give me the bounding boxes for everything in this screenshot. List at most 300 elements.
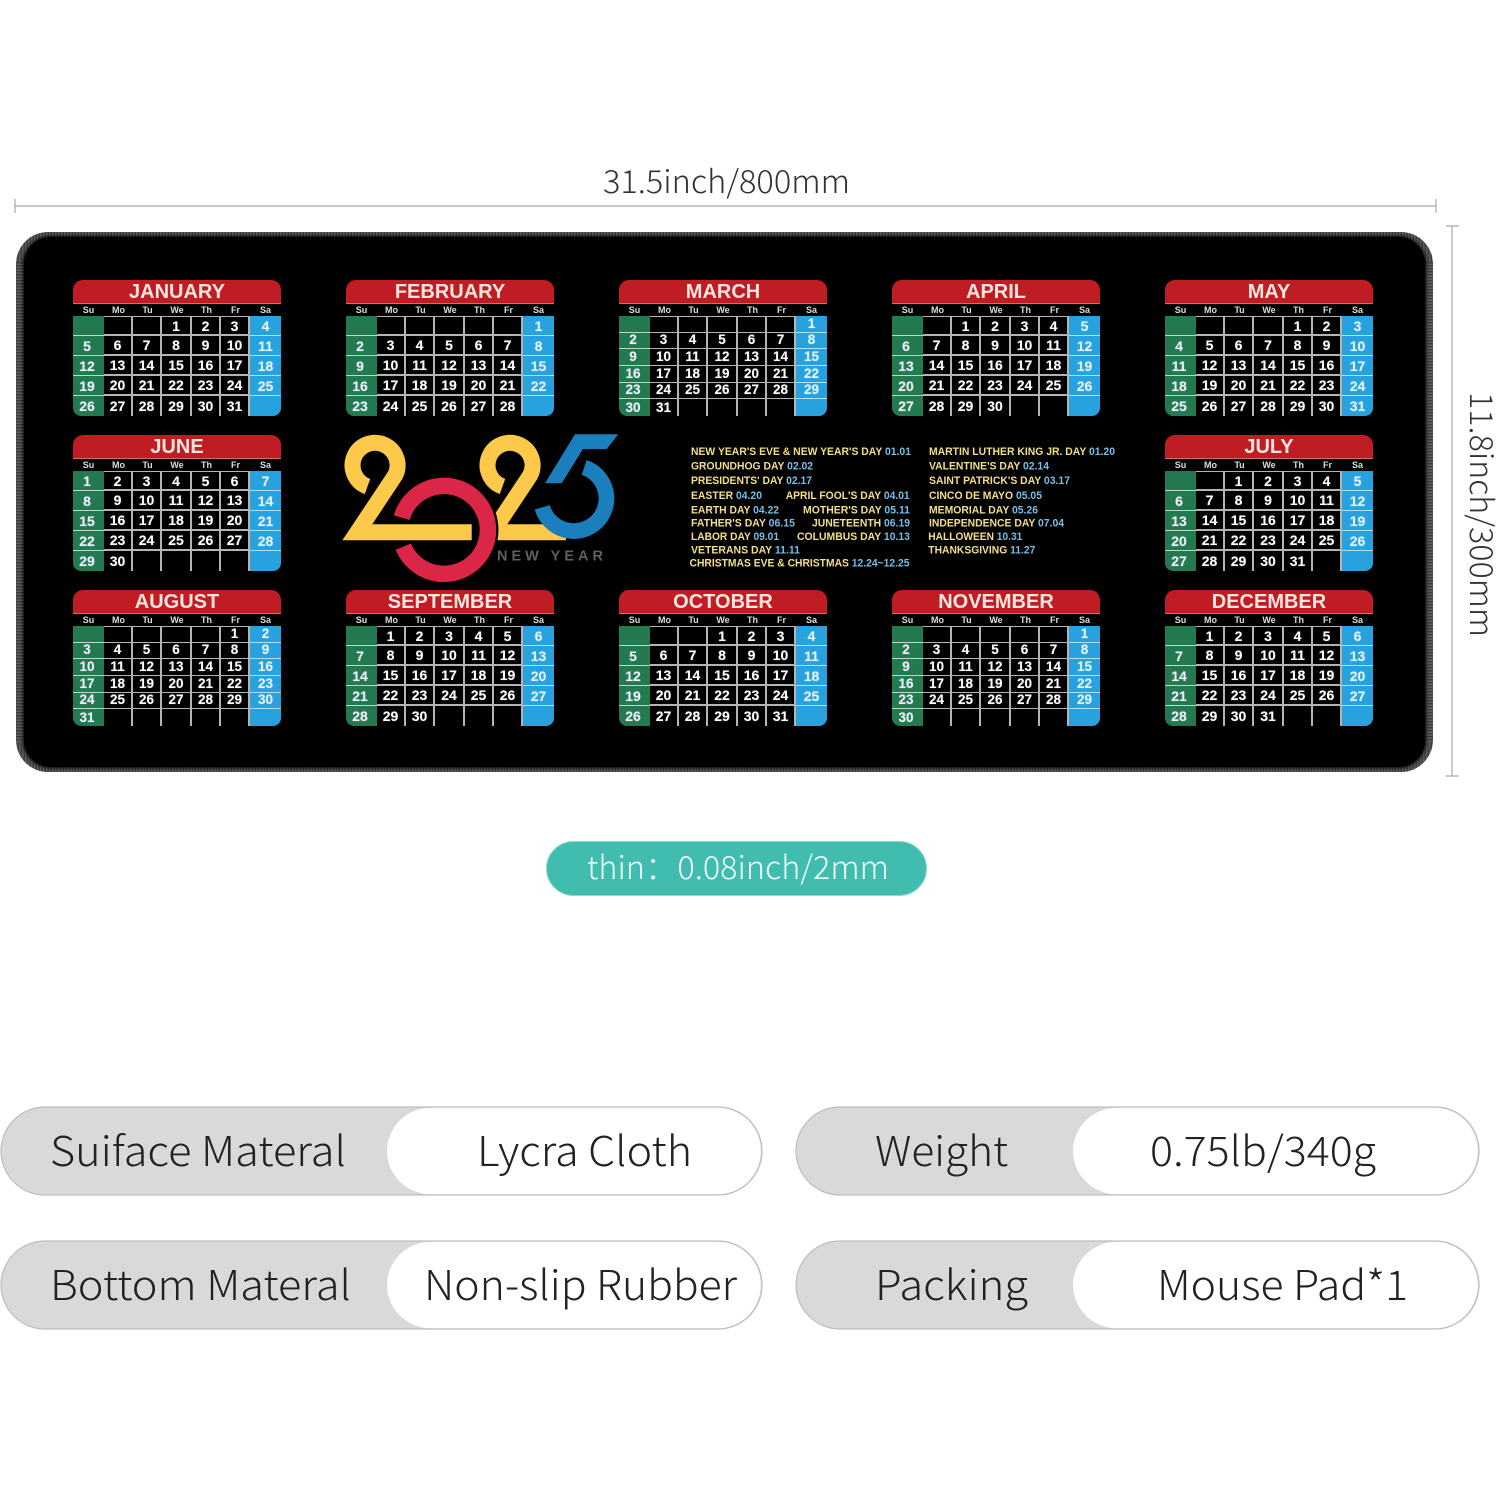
- November calendar: Mo: [931, 615, 944, 625]
- November calendar: 21: [1046, 676, 1061, 691]
- April calendar: 10: [1017, 337, 1032, 353]
- December calendar: 12: [1319, 647, 1334, 663]
- September calendar: 6: [535, 628, 542, 644]
- May calendar: Tu: [1234, 305, 1245, 315]
- March calendar: 5: [718, 332, 726, 347]
- February calendar: 9: [356, 358, 364, 374]
- January calendar: 2: [202, 318, 209, 334]
- March calendar: Th: [747, 305, 758, 315]
- September calendar: 18: [471, 667, 486, 683]
- August calendar: 17: [79, 676, 95, 691]
- July calendar: 17: [1290, 512, 1305, 528]
- April calendar: Th: [1020, 305, 1031, 315]
- left holiday column: FATHER'S DAY 06.15: [691, 518, 795, 530]
- December calendar: 6: [1354, 628, 1361, 644]
- August calendar: [73, 590, 281, 726]
- August calendar: 1: [231, 626, 238, 641]
- December calendar: 9: [1235, 647, 1242, 663]
- April calendar: 5: [1081, 318, 1088, 334]
- March calendar: 20: [744, 366, 759, 381]
- September calendar: 21: [352, 688, 368, 704]
- height dimension line: [1446, 226, 1459, 776]
- July calendar: JULY: [1244, 436, 1294, 458]
- November calendar: 28: [1046, 692, 1061, 707]
- March calendar: 23: [625, 382, 641, 397]
- January calendar: JANUARY: [129, 281, 225, 303]
- October calendar: 12: [625, 668, 641, 684]
- New Year caption: NEW YEAR: [497, 548, 604, 564]
- June calendar: 27: [227, 532, 242, 548]
- October calendar: Su: [629, 615, 640, 625]
- May calendar: 6: [1235, 337, 1242, 353]
- December calendar: 26: [1319, 687, 1334, 703]
- July calendar: 7: [1206, 492, 1213, 508]
- May calendar: 25: [1171, 398, 1187, 414]
- October calendar: 3: [777, 628, 784, 644]
- February calendar: 23: [352, 398, 368, 414]
- December calendar: [1165, 590, 1373, 726]
- April calendar: 19: [1077, 358, 1092, 374]
- March calendar: 11: [685, 349, 700, 364]
- May calendar: Su: [1175, 305, 1186, 315]
- January calendar: 31: [227, 398, 242, 414]
- February calendar: 14: [500, 357, 515, 373]
- May calendar: 3: [1354, 318, 1361, 334]
- March calendar: 6: [748, 332, 755, 347]
- March calendar: 24: [656, 382, 671, 397]
- March calendar: 3: [660, 332, 667, 347]
- November calendar: 29: [1077, 692, 1092, 707]
- October calendar: 20: [656, 687, 671, 703]
- May calendar: Sa: [1352, 305, 1363, 315]
- June calendar: 2: [114, 472, 121, 488]
- October calendar: 5: [629, 648, 637, 664]
- July calendar: 13: [1171, 512, 1187, 528]
- January calendar: 22: [168, 377, 184, 393]
- August calendar: Th: [201, 615, 212, 625]
- February calendar: 1: [535, 318, 542, 334]
- October calendar: 13: [656, 667, 671, 683]
- July calendar: 26: [1350, 532, 1365, 548]
- February calendar: 17: [383, 377, 398, 393]
- August calendar: 27: [168, 692, 184, 707]
- February calendar: 3: [387, 337, 394, 353]
- July calendar: 15: [1231, 512, 1246, 528]
- January calendar: 7: [143, 337, 150, 353]
- July calendar: 12: [1350, 492, 1365, 508]
- October calendar: Th: [747, 615, 758, 625]
- left holiday column: [690, 446, 911, 570]
- May calendar: 28: [1260, 398, 1276, 414]
- holiday list: [690, 446, 1115, 570]
- October calendar: 21: [685, 687, 700, 703]
- June calendar: 30: [110, 553, 125, 569]
- October calendar: Mo: [658, 615, 671, 625]
- June calendar: 8: [83, 492, 91, 508]
- July calendar: 20: [1171, 532, 1187, 548]
- April calendar: 7: [933, 337, 940, 353]
- January calendar: 23: [198, 377, 213, 393]
- November calendar: 26: [987, 692, 1003, 707]
- October calendar: 27: [656, 708, 671, 724]
- April calendar: 12: [1077, 338, 1092, 354]
- January calendar: 18: [258, 358, 273, 374]
- February calendar: 7: [504, 337, 511, 353]
- November calendar: 7: [1050, 642, 1057, 657]
- right holiday column: MEMORIAL DAY 05.26: [929, 504, 1038, 516]
- March calendar: Mo: [658, 305, 671, 315]
- June calendar: 21: [258, 512, 273, 528]
- February calendar: [346, 280, 554, 416]
- February calendar: We: [443, 305, 457, 315]
- first digit 2: [353, 443, 472, 532]
- May calendar: 8: [1294, 337, 1301, 353]
- September calendar: 30: [412, 708, 427, 724]
- November calendar: We: [989, 615, 1003, 625]
- June calendar: Tu: [142, 460, 153, 470]
- February calendar: 24: [383, 398, 398, 414]
- August calendar: 11: [110, 659, 125, 674]
- July calendar: 9: [1264, 492, 1272, 508]
- right holiday column: [928, 446, 1115, 556]
- February calendar: 11: [412, 357, 427, 373]
- January calendar: Tu: [142, 305, 153, 315]
- May calendar: 18: [1171, 378, 1187, 394]
- August calendar: 14: [198, 659, 213, 674]
- February calendar: 25: [412, 398, 427, 414]
- January calendar: 8: [172, 337, 180, 353]
- April calendar: 16: [987, 357, 1003, 373]
- September calendar: Su: [356, 615, 367, 625]
- April calendar: 28: [929, 398, 944, 414]
- May calendar: 30: [1319, 398, 1334, 414]
- digit 5 top stroke: [545, 434, 618, 483]
- August calendar: 5: [143, 642, 150, 657]
- left holiday column: LABOR DAY 09.01: [691, 531, 779, 543]
- October calendar: 16: [744, 667, 759, 683]
- August calendar: 20: [168, 676, 184, 691]
- June calendar: 16: [110, 512, 125, 528]
- December calendar: 29: [1202, 708, 1217, 724]
- left holiday column: CHRISTMAS EVE & CHRISTMAS 12.24~12.25: [690, 558, 910, 570]
- October calendar: 28: [685, 708, 700, 724]
- October calendar: 7: [689, 647, 696, 663]
- January calendar: 3: [231, 318, 238, 334]
- July calendar: 4: [1323, 472, 1330, 488]
- September calendar: 5: [504, 628, 511, 644]
- January calendar: 17: [227, 357, 242, 373]
- September calendar: SEPTEMBER: [388, 591, 512, 613]
- December calendar: Fr: [1323, 615, 1332, 625]
- March calendar: 4: [689, 332, 696, 347]
- May calendar: 2: [1323, 318, 1330, 334]
- July calendar: 14: [1202, 512, 1217, 528]
- October calendar: 29: [714, 708, 730, 724]
- November calendar: 12: [987, 659, 1003, 674]
- June calendar: 13: [227, 492, 242, 508]
- November calendar: 15: [1077, 659, 1092, 674]
- August calendar: We: [170, 615, 184, 625]
- January calendar: 15: [168, 357, 184, 373]
- December calendar: 20: [1350, 668, 1365, 684]
- November calendar: 20: [1017, 676, 1032, 691]
- December calendar: 10: [1260, 647, 1276, 663]
- June calendar: 14: [258, 492, 273, 508]
- March calendar: 15: [804, 349, 819, 364]
- left holiday column: NEW YEAR'S EVE & NEW YEAR'S DAY 01.01: [691, 446, 911, 458]
- April calendar: 25: [1046, 377, 1061, 393]
- April calendar: Tu: [961, 305, 972, 315]
- June calendar: 26: [198, 532, 213, 548]
- October calendar: Fr: [777, 615, 786, 625]
- February calendar: 19: [441, 377, 457, 393]
- June calendar: 5: [202, 472, 209, 488]
- August calendar: 30: [258, 692, 273, 707]
- December calendar: 8: [1206, 647, 1213, 663]
- June calendar: 17: [139, 512, 154, 528]
- May calendar: 23: [1319, 377, 1334, 393]
- April calendar: We: [989, 305, 1003, 315]
- July calendar: 2: [1264, 472, 1272, 488]
- May calendar: 5: [1206, 337, 1213, 353]
- December calendar: DECEMBER: [1212, 591, 1326, 613]
- left holiday column: GROUNDHOG DAY 02.02: [691, 461, 813, 473]
- June calendar: 15: [79, 512, 95, 528]
- October calendar: 1: [718, 628, 726, 644]
- October calendar: OCTOBER: [673, 591, 773, 613]
- August calendar: Sa: [260, 615, 271, 625]
- July calendar: 25: [1319, 532, 1334, 548]
- May calendar: 1: [1294, 318, 1301, 334]
- June calendar: Fr: [231, 460, 240, 470]
- July calendar: We: [1262, 460, 1276, 470]
- January calendar: 12: [79, 358, 95, 374]
- February calendar: 26: [441, 398, 457, 414]
- April calendar: 3: [1021, 318, 1028, 334]
- spec: surface material: Lycra Cloth: [477, 1118, 692, 1178]
- October calendar: 18: [804, 668, 819, 684]
- May calendar: Fr: [1323, 305, 1332, 315]
- centre artwork: logo and holidays: [342, 434, 1115, 582]
- April calendar: 17: [1017, 357, 1032, 373]
- May calendar: 20: [1231, 377, 1246, 393]
- October calendar: Tu: [688, 615, 699, 625]
- August calendar: Tu: [142, 615, 153, 625]
- May calendar: 15: [1290, 357, 1305, 373]
- June calendar: Sa: [260, 460, 271, 470]
- right holiday column: MARTIN LUTHER KING JR. DAY 01.20: [929, 446, 1115, 458]
- January calendar: 27: [110, 398, 125, 414]
- April calendar: 15: [958, 357, 973, 373]
- October calendar: Sa: [806, 615, 817, 625]
- July calendar: 6: [1175, 492, 1183, 508]
- spec: weight: [796, 1107, 1479, 1195]
- March calendar: 13: [744, 349, 759, 364]
- September calendar: 24: [441, 687, 457, 703]
- July calendar: Fr: [1323, 460, 1332, 470]
- August calendar: 16: [258, 659, 273, 674]
- left holiday column: PRESIDENTS' DAY 02.17: [691, 475, 812, 487]
- December calendar: We: [1262, 615, 1276, 625]
- January calendar: 14: [139, 357, 154, 373]
- July calendar: 31: [1290, 553, 1305, 569]
- September calendar: 28: [352, 708, 368, 724]
- December calendar: 1: [1206, 628, 1213, 644]
- August calendar: 26: [139, 692, 154, 707]
- January calendar: Th: [201, 305, 212, 315]
- December calendar: Su: [1175, 615, 1186, 625]
- September calendar: Sa: [533, 615, 544, 625]
- spec: surface material: [1, 1107, 762, 1195]
- June calendar: Su: [83, 460, 94, 470]
- ring outline gap: [402, 486, 488, 574]
- March calendar: 28: [773, 382, 788, 397]
- April calendar: Mo: [931, 305, 944, 315]
- May calendar: 22: [1290, 377, 1305, 393]
- right holiday column: SAINT PATRICK'S DAY 03.17: [929, 475, 1070, 487]
- May calendar: 14: [1260, 357, 1276, 373]
- January calendar: 6: [114, 337, 121, 353]
- June calendar: 25: [168, 532, 184, 548]
- left holiday column: EARTH DAY 04.22: [691, 504, 779, 516]
- November calendar: 2: [902, 642, 910, 657]
- thickness badge: [546, 842, 926, 896]
- August calendar: 21: [198, 676, 213, 691]
- December calendar: 23: [1231, 687, 1246, 703]
- March calendar: 29: [804, 382, 819, 397]
- December calendar: 16: [1231, 667, 1246, 683]
- February calendar: 22: [531, 378, 546, 394]
- July calendar: 3: [1294, 472, 1301, 488]
- April calendar: Sa: [1079, 305, 1090, 315]
- June calendar: 28: [258, 532, 273, 548]
- July calendar: 19: [1350, 512, 1365, 528]
- May calendar: 7: [1264, 337, 1272, 353]
- September calendar: [346, 590, 554, 726]
- September calendar: 4: [475, 628, 482, 644]
- left holiday column: APRIL FOOL'S DAY 04.01: [786, 490, 910, 502]
- December calendar: Th: [1293, 615, 1304, 625]
- August calendar: 19: [139, 676, 154, 691]
- December calendar: 25: [1290, 687, 1305, 703]
- November calendar: 24: [929, 692, 944, 707]
- August calendar: 8: [231, 642, 238, 657]
- June calendar: 6: [231, 472, 238, 488]
- April calendar: 30: [987, 398, 1003, 414]
- November calendar: NOVEMBER: [938, 591, 1054, 613]
- September calendar: Fr: [504, 615, 513, 625]
- April calendar: 20: [898, 378, 914, 394]
- width dimension line: [15, 199, 1436, 213]
- spec: weight: 0.75lb/340g: [1150, 1118, 1376, 1178]
- December calendar: Tu: [1234, 615, 1245, 625]
- March calendar: 22: [804, 366, 819, 381]
- November calendar: 16: [898, 676, 914, 691]
- October calendar: [619, 590, 827, 726]
- January calendar: 26: [79, 398, 95, 414]
- February calendar: 8: [535, 338, 542, 354]
- May calendar: MAY: [1248, 281, 1290, 303]
- May calendar: 10: [1350, 338, 1365, 354]
- July calendar: Su: [1175, 460, 1186, 470]
- August calendar: 2: [262, 626, 269, 641]
- spec: bottom material: Non-slip Rubber: [424, 1252, 737, 1312]
- March calendar: [619, 280, 827, 416]
- May calendar: 11: [1172, 358, 1186, 374]
- May calendar: 27: [1231, 398, 1246, 414]
- September calendar: 1: [387, 628, 394, 644]
- May calendar: 13: [1231, 357, 1246, 373]
- August calendar: 6: [172, 642, 180, 657]
- February calendar: Sa: [533, 305, 544, 315]
- July calendar: 29: [1231, 553, 1246, 569]
- January calendar: 1: [172, 318, 180, 334]
- December calendar: 2: [1235, 628, 1242, 644]
- January calendar: Su: [83, 305, 94, 315]
- December calendar: 5: [1323, 628, 1330, 644]
- left holiday column: JUNETEENTH 06.19: [812, 518, 910, 530]
- July calendar: Mo: [1204, 460, 1217, 470]
- right holiday column: CINCO DE MAYO 05.05: [929, 490, 1042, 502]
- June calendar: [73, 435, 281, 571]
- December calendar: 31: [1260, 708, 1276, 724]
- December calendar: 17: [1260, 667, 1276, 683]
- September calendar: Tu: [415, 615, 426, 625]
- June calendar: 10: [139, 492, 154, 508]
- January calendar: We: [170, 305, 184, 315]
- February calendar: 18: [412, 377, 427, 393]
- November calendar: 25: [958, 692, 973, 707]
- September calendar: 16: [412, 667, 427, 683]
- January calendar: 16: [198, 357, 213, 373]
- August calendar: 28: [198, 692, 213, 707]
- May calendar: 9: [1323, 337, 1330, 353]
- March calendar: 17: [656, 366, 671, 381]
- June calendar: 29: [79, 553, 95, 569]
- August calendar: Mo: [112, 615, 125, 625]
- September calendar: We: [443, 615, 457, 625]
- February calendar: 15: [531, 358, 546, 374]
- November calendar: 1: [1081, 626, 1088, 641]
- June calendar: 7: [262, 472, 269, 488]
- April calendar: 11: [1046, 337, 1061, 353]
- April calendar: 24: [1017, 377, 1032, 393]
- March calendar: We: [716, 305, 730, 315]
- May calendar: Th: [1293, 305, 1304, 315]
- November calendar: 17: [929, 676, 944, 691]
- February calendar: Th: [474, 305, 485, 315]
- July calendar: 10: [1290, 492, 1305, 508]
- right holiday column: INDEPENDENCE DAY 07.04: [929, 518, 1065, 530]
- September calendar: 29: [383, 708, 398, 724]
- October calendar: 19: [625, 688, 641, 704]
- December calendar: 22: [1202, 687, 1217, 703]
- February calendar: 27: [471, 398, 486, 414]
- February calendar: Su: [356, 305, 367, 315]
- April calendar: Su: [902, 305, 913, 315]
- December calendar: 14: [1171, 668, 1187, 684]
- November calendar: 30: [898, 710, 914, 725]
- January calendar: Mo: [112, 305, 125, 315]
- February calendar: 5: [445, 337, 453, 353]
- April calendar: Fr: [1050, 305, 1059, 315]
- January calendar: 5: [83, 338, 91, 354]
- June calendar: 18: [168, 512, 184, 528]
- December calendar: 30: [1231, 708, 1246, 724]
- March calendar: 19: [714, 366, 730, 381]
- September calendar: 7: [356, 648, 364, 664]
- panel: calendar mouse pad: [16, 232, 1433, 772]
